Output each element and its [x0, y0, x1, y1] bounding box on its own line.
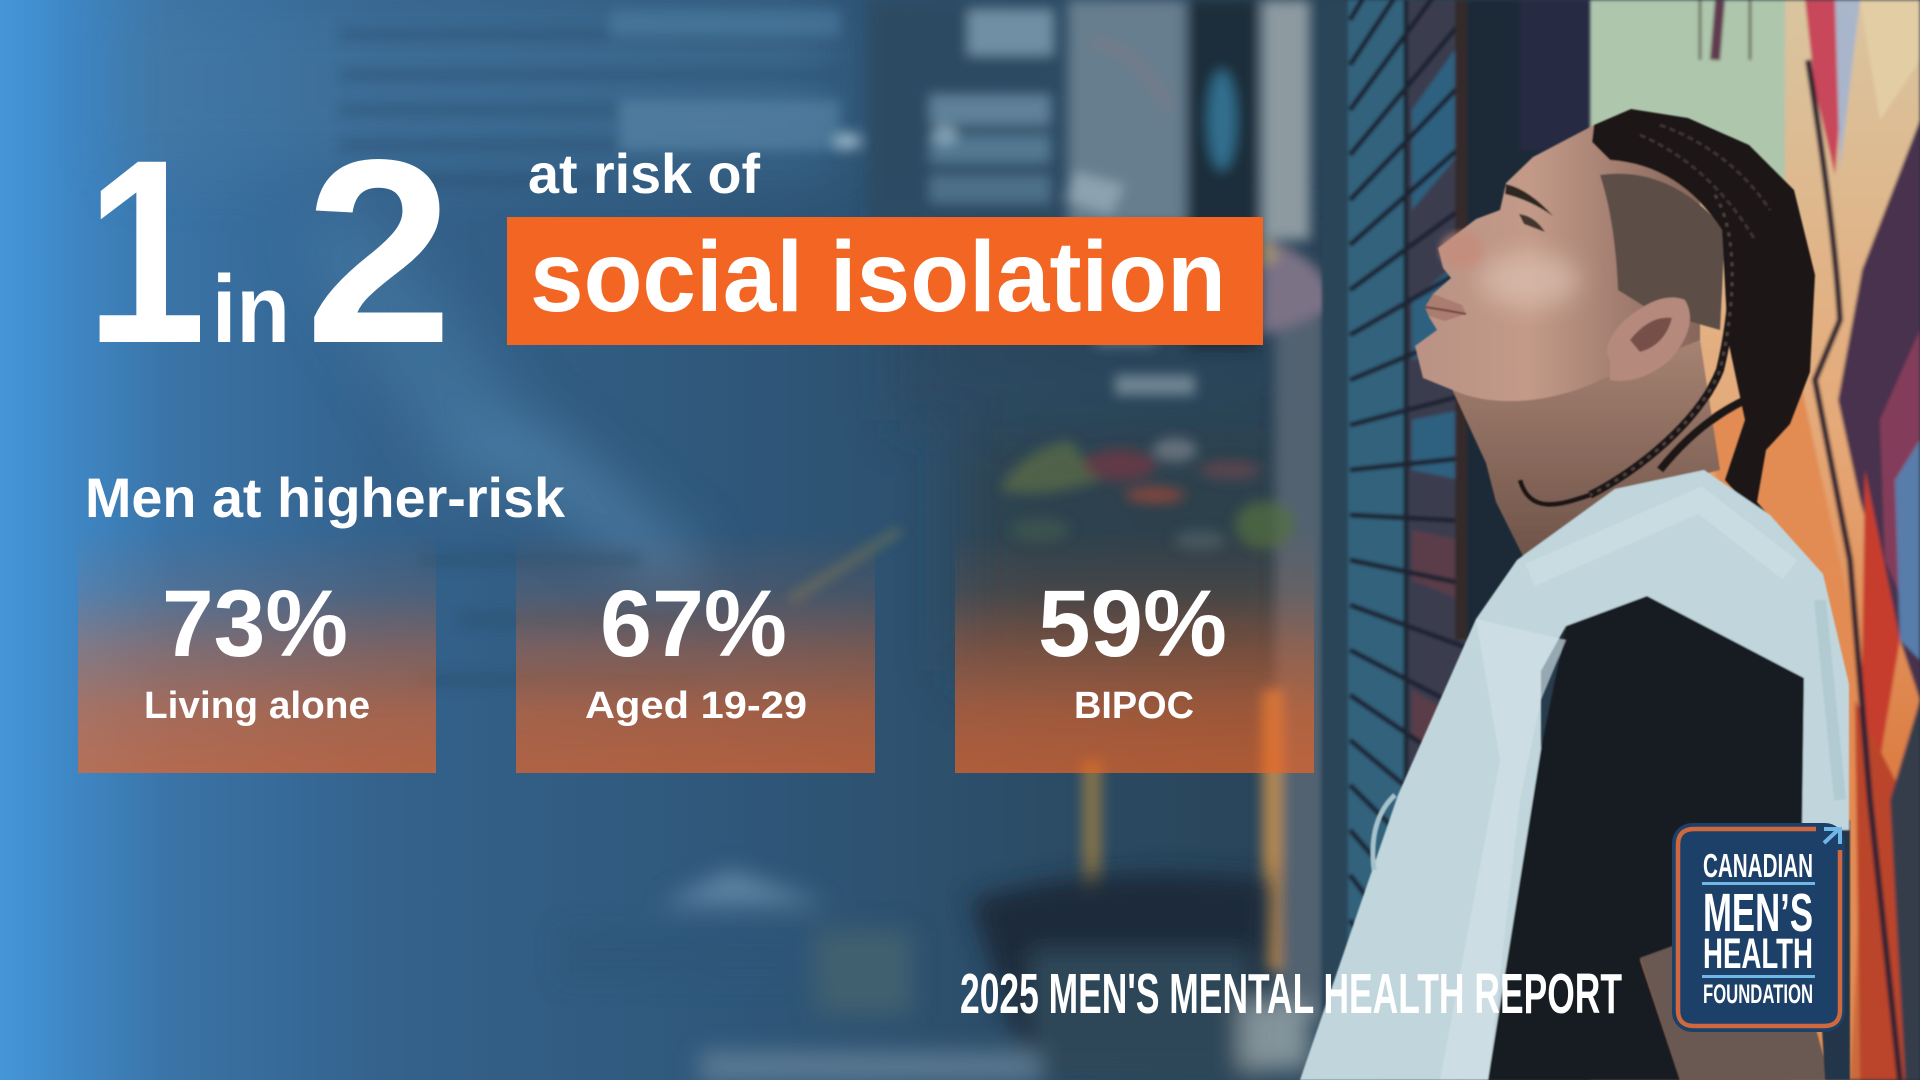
arm [1640, 900, 1830, 1080]
eye and brow [1505, 184, 1553, 216]
mural wall [1590, 0, 1920, 1080]
black t-shirt [1480, 590, 1810, 1080]
fade haircut [1600, 174, 1725, 330]
statistic headline: 1 in 2: in [212, 256, 290, 363]
logo: Canadian Men's Health Foundation [1672, 823, 1845, 1032]
stat tile: living alone: Living alone [144, 685, 370, 727]
logo: Canadian Men's Health Foundation: MEN’S [1703, 883, 1813, 943]
lips [1425, 294, 1466, 321]
stat tile: aged 19-29: 67% [600, 571, 787, 677]
nose shading [1440, 232, 1484, 268]
highlight on cheek [1480, 252, 1580, 308]
stat tile: living alone: 73% [162, 571, 348, 677]
subheading: at risk of: at risk of [528, 142, 760, 205]
logo: Canadian Men's Health Foundation: HEALTH [1703, 930, 1813, 978]
icon: arrow [1824, 829, 1840, 844]
face and head [1415, 125, 1700, 401]
section heading: Men at higher-risk [85, 466, 566, 529]
stat tile: living alone [78, 530, 436, 773]
hair and braids [1592, 109, 1815, 554]
stat tile: aged 19-29: Aged 19-29 [585, 685, 807, 727]
neck [1450, 330, 1720, 560]
ear [1607, 298, 1690, 381]
statistic headline: 1 in 2: 2 [305, 105, 453, 398]
statistic headline: 1 in 2: 1 [86, 105, 206, 398]
photo subject: man looking upward [1300, 109, 1850, 1080]
stat tile: BIPOC: BIPOC [1074, 685, 1194, 727]
white jacket draped on shoulders [1300, 470, 1849, 1080]
logo: Canadian Men's Health Foundation: FOUNDATION [1703, 979, 1813, 1009]
stat tile: BIPOC [955, 530, 1314, 773]
statistic headline: 1 in 2 [86, 105, 453, 398]
stat tile: BIPOC: 59% [1038, 571, 1227, 677]
logo: Canadian Men's Health Foundation: CANADIAN [1703, 847, 1813, 884]
stat tile: aged 19-29 [516, 530, 875, 773]
brick wall [1322, 0, 1594, 1080]
highlight banner: social isolation: social isolation [530, 221, 1226, 333]
